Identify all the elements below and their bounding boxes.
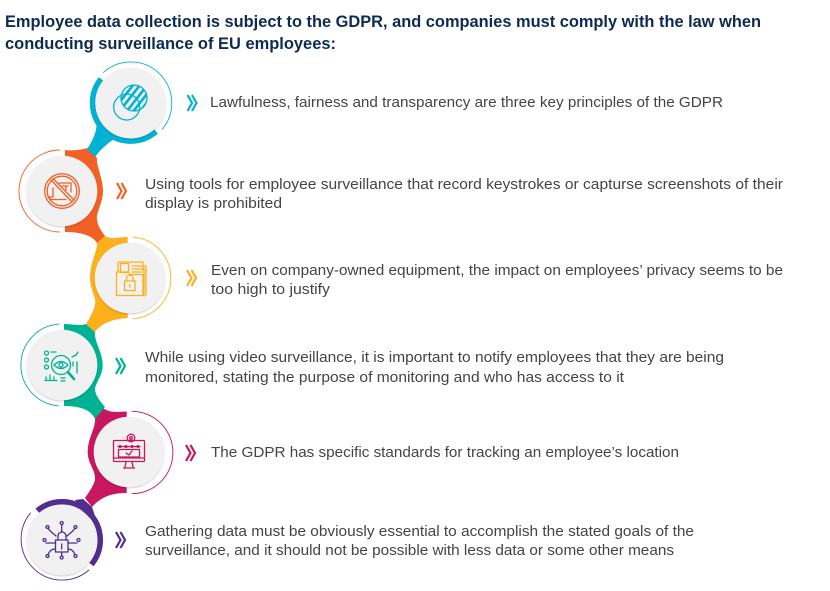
icon: network padlock <box>43 522 80 559</box>
text: step 5: The GDPR has specific standards for tracking an employee’s location <box>211 445 679 461</box>
blue ring band <box>93 79 156 141</box>
panel: step 1 key principles <box>87 62 723 157</box>
chevrons <box>186 445 195 461</box>
text: step 3: Even on company-owned equipment, the impact on employees’ privacy seems to be <box>211 263 783 279</box>
thin purple ring <box>21 513 89 580</box>
text: step 2: display is prohibited <box>145 196 282 212</box>
thin pink ring <box>132 411 173 494</box>
thin orange ring <box>19 150 60 232</box>
blue stem <box>87 122 114 157</box>
panel: step 3 company equipment <box>86 236 783 332</box>
purple ring band <box>37 502 100 564</box>
text: step 4: While using video surveillance, it is important to notify employees that they are being <box>145 350 724 366</box>
purple junction <box>75 499 97 522</box>
chevrons <box>187 270 196 286</box>
text: step 6: Gathering data must be obviously essential to accomplish the stated goals of the <box>145 524 694 540</box>
text: step 4 <box>145 350 724 386</box>
icon: folder with padlock <box>116 262 146 296</box>
text: step 6: surveillance, and it should not be possible with less data or some other means <box>145 543 674 559</box>
text: step 2: Using tools for employee surveillance that record keystrokes or capturse screenshots of their <box>145 177 783 193</box>
text: step 3: too high to justify <box>211 282 331 298</box>
text: step 3 <box>211 263 783 298</box>
teal band <box>64 324 105 419</box>
text: step 2 <box>145 177 783 212</box>
grey disc <box>94 417 164 487</box>
text: step 1: Lawfulness, fairness and transparency are three key principles of the GDPR <box>210 95 723 111</box>
chevrons <box>116 532 125 548</box>
chevrons <box>116 358 125 374</box>
grey disc <box>27 156 97 226</box>
icon: magnifier with eye <box>44 351 78 381</box>
grey disc <box>95 243 165 313</box>
grey disc <box>27 505 97 575</box>
panel: step 2 prohibited tools <box>19 148 783 243</box>
chevrons <box>188 95 196 111</box>
orange band <box>65 148 105 243</box>
icon: prohibited laptop <box>45 174 79 208</box>
pink band <box>85 408 127 507</box>
title: conducting surveillance of EU employees: <box>5 34 336 53</box>
title <box>5 12 761 53</box>
icon: monitor with pin <box>114 434 144 468</box>
thin teal ring <box>21 324 59 406</box>
text: step 4: monitored, stating the purpose of monitoring and who has access to it <box>145 370 624 386</box>
chevrons <box>117 183 126 199</box>
grey disc <box>27 330 97 400</box>
grey disc <box>95 68 166 138</box>
text: step 6 <box>145 524 694 559</box>
title: Employee data collection is subject to the GDPR, and companies must comply with the law when <box>5 12 761 31</box>
icon: overlapping circles <box>114 84 152 120</box>
yellow band <box>86 236 128 332</box>
panel: step 6 data minimisation <box>21 499 694 580</box>
thin yellow ring <box>133 237 171 319</box>
thin blue ring <box>103 62 172 129</box>
panel: step 4 video surveillance <box>21 324 724 419</box>
panel: step 5 location tracking <box>85 408 679 507</box>
